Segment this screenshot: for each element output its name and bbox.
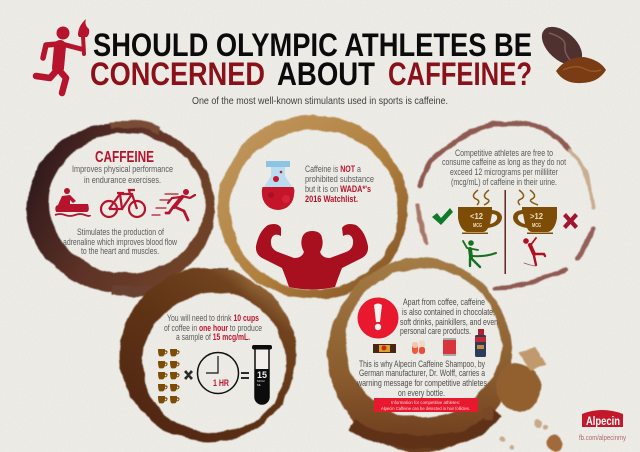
text: apart from coffee: soft drinks, painkillers, and even bbox=[400, 317, 498, 328]
text: drink ten cups: of coffee in one hour to produce bbox=[164, 323, 262, 333]
icon: exclamation circle bbox=[358, 298, 398, 338]
icon: flexing athlete bbox=[256, 224, 368, 290]
icon: cup over limit: MCG bbox=[532, 223, 541, 229]
icon: check mark bbox=[432, 208, 453, 225]
icon: sprinter bbox=[152, 189, 195, 220]
icon: green athlete kicking bbox=[463, 240, 496, 267]
text: apart from coffee: is also contained in chocolate, bbox=[402, 307, 495, 318]
text: improves performance: in endurance exercises. bbox=[84, 175, 161, 185]
title bbox=[90, 27, 532, 92]
divider bbox=[504, 190, 506, 274]
text: stimulates adrenaline bbox=[63, 227, 177, 256]
callout: warning label: Information for competitive athletes: bbox=[391, 400, 460, 405]
icon: runner with torch bbox=[36, 19, 89, 93]
text: competitive limit: Competitive athletes are free to bbox=[455, 148, 553, 158]
icon: multiply sign bbox=[184, 370, 193, 380]
panel: urine limit bbox=[432, 148, 578, 274]
text: not prohibited: prohibited substance bbox=[305, 174, 374, 185]
text: drink ten cups bbox=[164, 313, 262, 342]
callout: warning label bbox=[374, 398, 478, 412]
icon: chocolate bar bbox=[373, 344, 396, 353]
text: stimulates adrenaline: to the heart and muscles. bbox=[81, 246, 159, 256]
text: drink ten cups: You will need to drink 10 cups bbox=[167, 313, 259, 323]
icon: shampoo bottle bbox=[475, 329, 486, 357]
icon: coffee beans bbox=[535, 20, 606, 83]
title: ABOUT bbox=[277, 56, 375, 92]
coffee ring: other products bbox=[328, 258, 512, 452]
icon: test tube: ML bbox=[257, 383, 261, 387]
icon: clock one hour: 1 HR bbox=[213, 378, 229, 388]
icon: ten coffee cups bbox=[158, 349, 180, 403]
coffee stain splashes bbox=[483, 348, 563, 451]
icon: cycling bbox=[101, 190, 145, 217]
callout: warning label: Alpecin Caffeine can be detected in hair follicles. bbox=[381, 406, 470, 411]
text: competitive limit: (mcg/mL) of caffeine in their urine. bbox=[451, 177, 557, 187]
text: improves performance bbox=[72, 164, 173, 185]
title: CONCERNED bbox=[90, 56, 265, 92]
text: drink ten cups: a sample of 15 mcg/mL. bbox=[176, 332, 250, 342]
coffee ring: watchlist bbox=[218, 115, 408, 299]
text: apart from coffee: Apart from coffee, caffeine bbox=[403, 297, 485, 308]
text: competitive limit: consume caffeine as long as they do not bbox=[442, 157, 566, 167]
text: stimulates adrenaline: Stimulates the production of bbox=[77, 227, 164, 237]
icon: red athlete falling bbox=[523, 238, 545, 266]
text: alpecin warning: on every bottle. bbox=[398, 388, 445, 399]
text: stimulates adrenaline: adrenaline which improves blood flow bbox=[63, 237, 177, 247]
text: alpecin warning bbox=[356, 359, 487, 399]
icon: cup over limit: >12 bbox=[530, 211, 543, 221]
text: alpecin warning: This is why Alpecin Caffeine Shampoo, by bbox=[359, 359, 485, 370]
icon: canoeing bbox=[55, 188, 90, 216]
panel: caffeine benefits bbox=[55, 149, 195, 256]
logo: alpecin: Alpecin bbox=[586, 414, 620, 428]
icon: test tube: 15 bbox=[257, 370, 268, 381]
text: alpecin warning: warning message for competitive athletes bbox=[356, 378, 487, 389]
icon: cup under limit: MCG bbox=[473, 223, 482, 229]
icon: cup over limit bbox=[513, 190, 557, 234]
subtitle: One of the most well-known stimulants used in sports is caffeine. bbox=[192, 96, 448, 107]
text: competitive limit bbox=[442, 148, 566, 187]
icon: test tube bbox=[252, 345, 272, 404]
heading: caffeine: CAFFEINE bbox=[95, 149, 154, 166]
icon: cross mark bbox=[563, 213, 578, 229]
coffee ring: ten cups bbox=[120, 268, 296, 442]
icon: flask bbox=[262, 161, 294, 210]
coffee ring: caffeine bbox=[27, 122, 228, 292]
coffee ring: urine limit bbox=[418, 123, 594, 288]
panel: watchlist bbox=[256, 161, 374, 290]
text: not prohibited bbox=[305, 164, 374, 205]
text: competitive limit: exceed 12 micrograms per milliliter bbox=[450, 167, 558, 177]
icon: cup under limit bbox=[458, 190, 502, 234]
title: CAFFEINE? bbox=[388, 56, 532, 92]
text: alpecin warning: German manufacturer, Dr. Wolff, carries a bbox=[359, 368, 486, 379]
text: apart from coffee: personal care products. bbox=[400, 326, 471, 337]
title: SHOULD OLYMPIC ATHLETES BE bbox=[93, 27, 532, 63]
text: apart from coffee bbox=[400, 297, 498, 337]
logo: alpecin bbox=[582, 410, 623, 428]
icon: test tube: MCG/ bbox=[257, 379, 265, 383]
icon: pills bbox=[412, 340, 425, 354]
text: not prohibited: Caffeine is NOT a bbox=[305, 164, 362, 175]
text: not prohibited: 2016 Watchlist. bbox=[305, 194, 358, 205]
text: facebook url: fb.com/alpecinmy bbox=[579, 435, 626, 442]
text: improves performance: Improves physical performance bbox=[72, 164, 173, 174]
icon: cup under limit: <12 bbox=[470, 211, 483, 221]
icon: equals sign bbox=[241, 372, 249, 379]
panel: other products bbox=[356, 297, 498, 412]
icon: soda can bbox=[443, 338, 456, 356]
text: not prohibited: but it is on WADA*'s bbox=[305, 184, 371, 195]
panel: ten cups bbox=[158, 313, 272, 404]
